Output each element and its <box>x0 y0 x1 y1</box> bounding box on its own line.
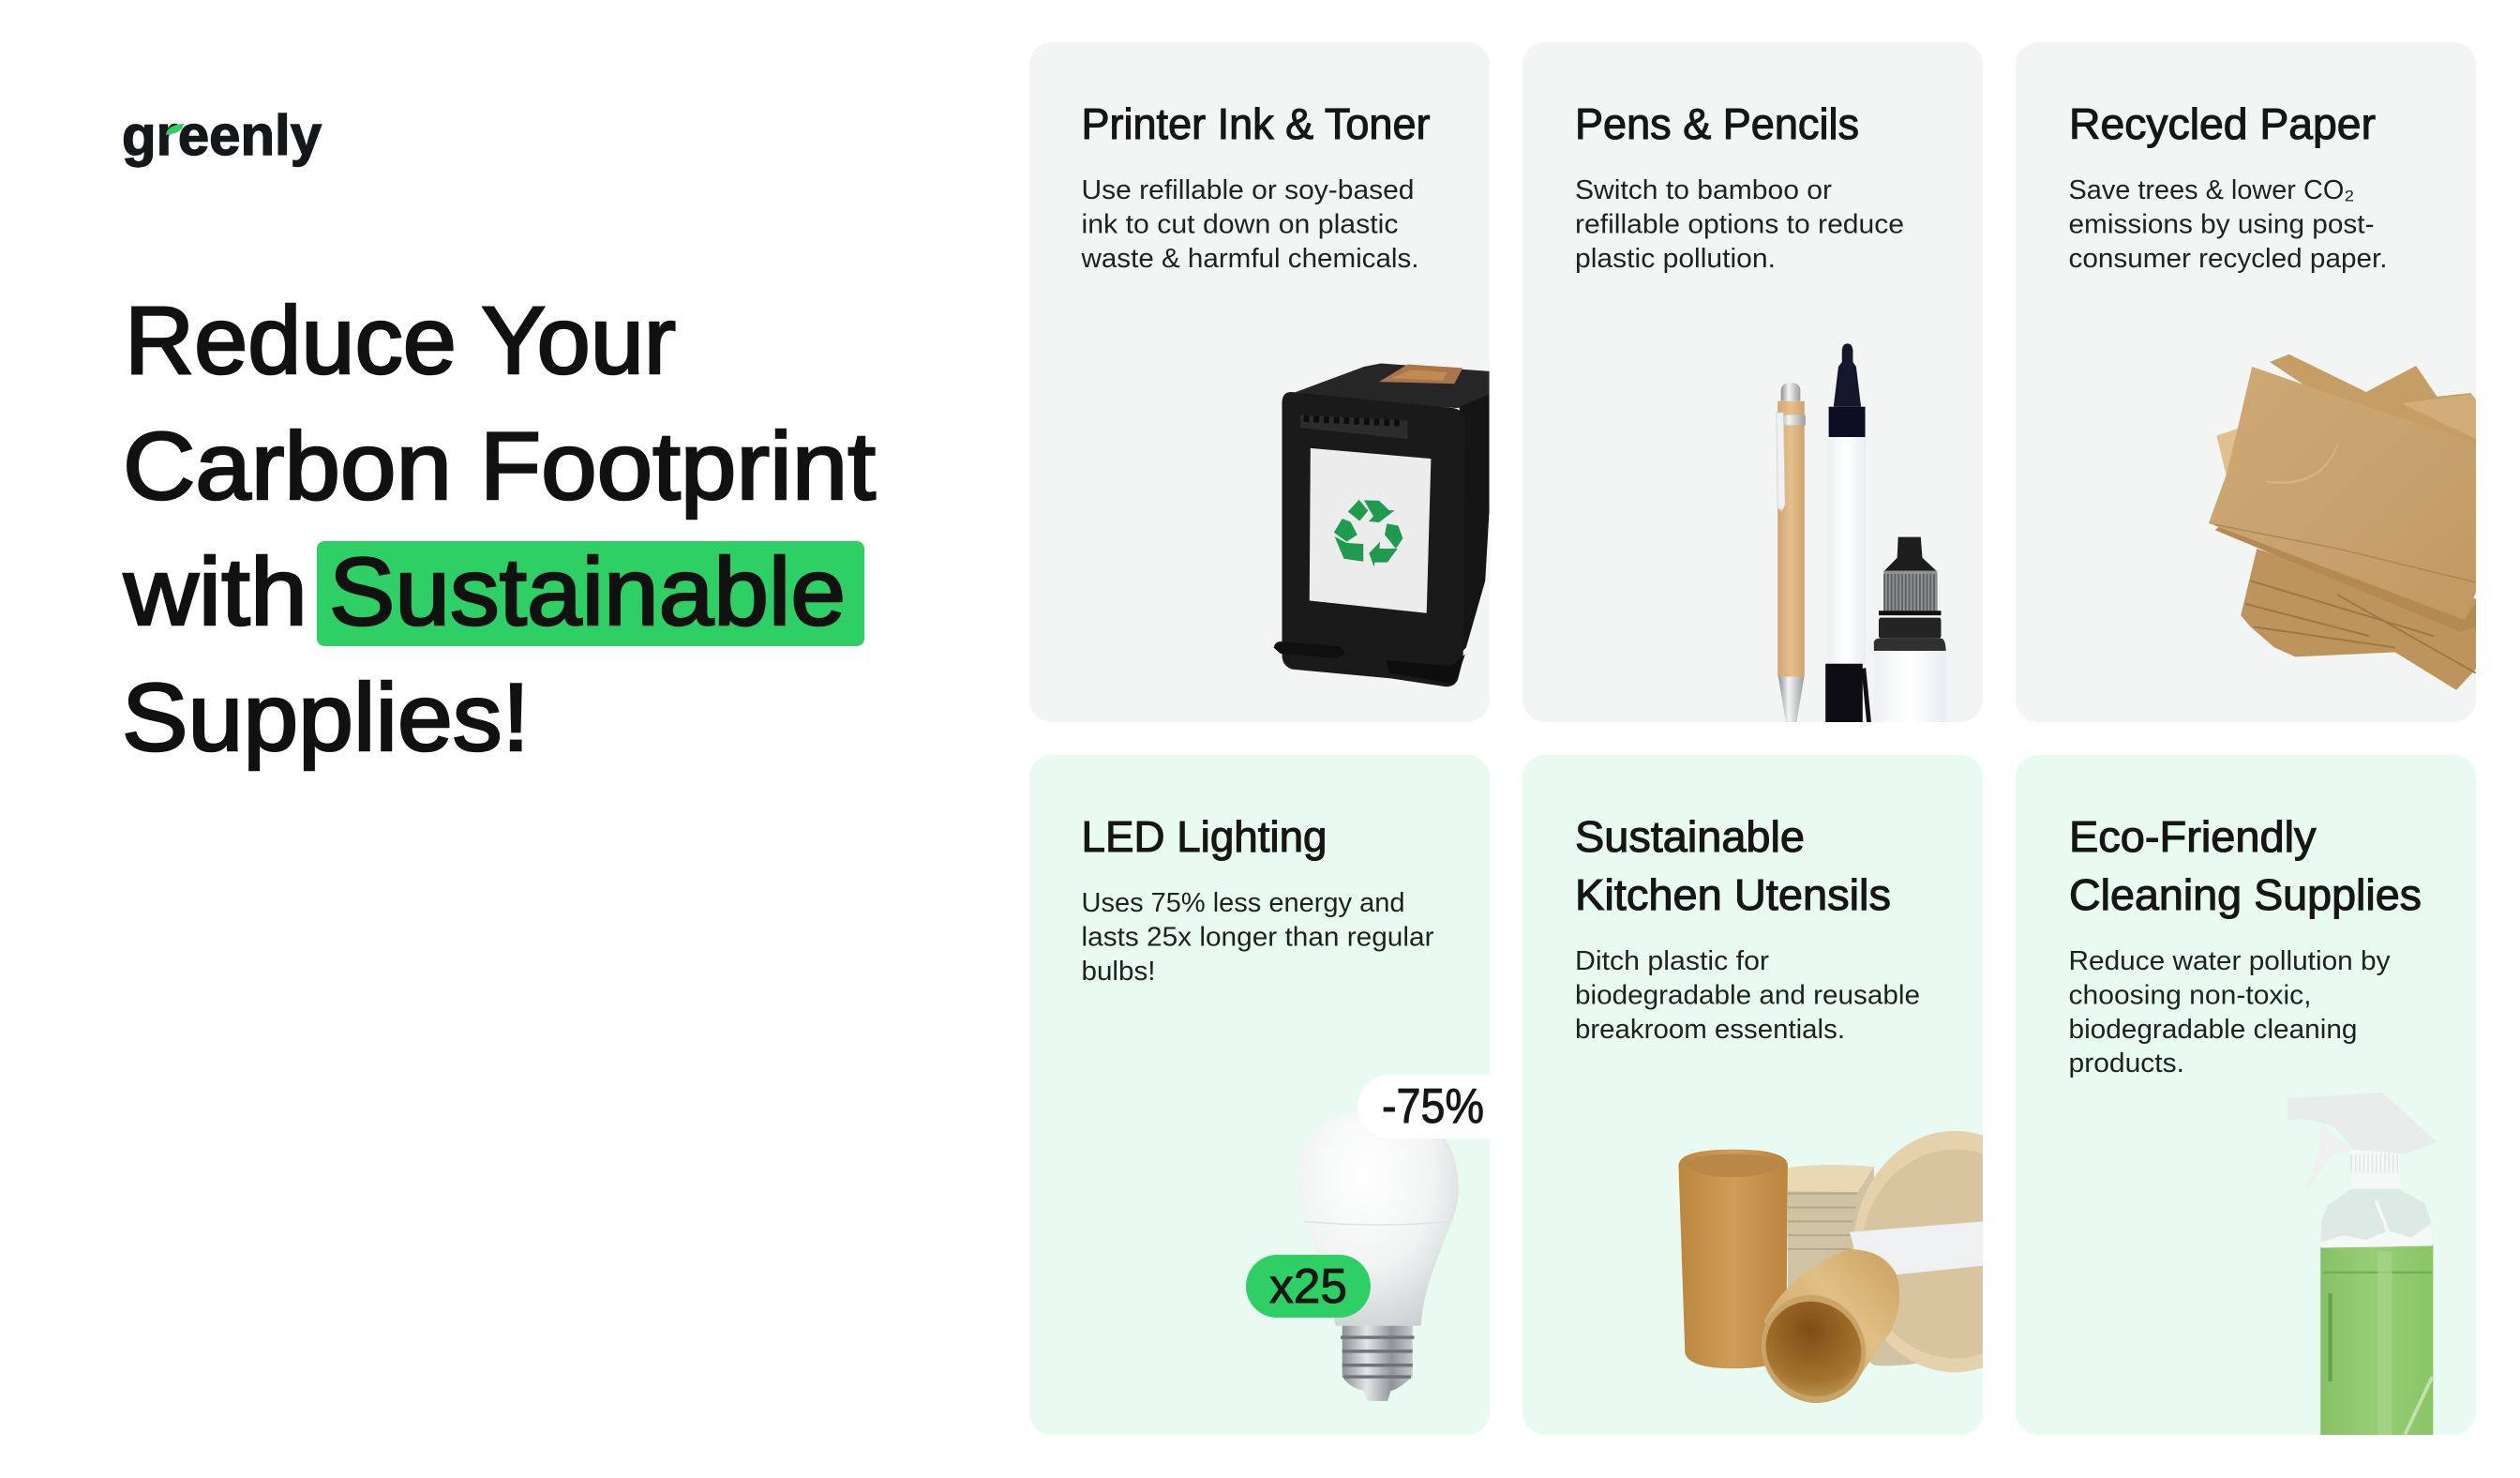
card title: Sustainable <box>1575 812 1805 861</box>
icon: ink cartridge <box>1274 364 1490 686</box>
icon: stack of kraft paper <box>2209 354 2479 690</box>
card description: Uses 75% less energy and <box>1082 888 1404 918</box>
icon: spray bottle <box>2288 1093 2437 1437</box>
badge: x25 <box>1246 1255 1371 1318</box>
card description <box>2068 946 2391 1078</box>
card description: plastic pollution. <box>1575 244 1776 274</box>
card title: Kitchen Utensils <box>1575 870 1891 919</box>
card description <box>2068 175 2387 274</box>
card description: Ditch plastic for <box>1575 946 1770 976</box>
panel: Sustainable Kitchen Utensils <box>1522 755 1983 1435</box>
panel: Printer Ink & Toner <box>1029 42 1490 722</box>
card description: bulbs! <box>1082 957 1155 987</box>
card title: LED Lighting <box>1082 812 1328 861</box>
icon: bamboo pen <box>1777 383 1806 724</box>
card description: refillable options to reduce <box>1575 209 1904 239</box>
card description: lasts 25x longer than regular <box>1082 922 1434 952</box>
panel: Recycled Paper <box>2016 42 2479 722</box>
card description: breakroom essentials. <box>1575 1015 1845 1045</box>
main heading: Reduce Your <box>125 287 676 394</box>
card description <box>1575 175 1904 274</box>
card description: products. <box>2068 1048 2184 1078</box>
label with recycling symbol <box>1310 448 1431 613</box>
icon: bamboo cups and plates <box>1678 1131 1983 1403</box>
card title: Printer Ink & Toner <box>1082 99 1431 148</box>
main heading: Supplies! <box>122 664 530 771</box>
card description: biodegradable and reusable <box>1575 980 1920 1010</box>
card description: choosing non-toxic, <box>2068 980 2312 1010</box>
card title <box>2069 812 2422 919</box>
logo: greenly: greenly <box>122 104 322 167</box>
card description: Switch to bamboo or <box>1575 175 1833 205</box>
icon: leaf on the r <box>166 124 184 135</box>
badge: -75% <box>1358 1075 1490 1139</box>
card description: consumer recycled paper. <box>2068 244 2387 274</box>
card description: emissions by using post- <box>2068 209 2374 239</box>
highlight: Sustainable: Sustainable <box>329 538 846 645</box>
panel: Eco-Friendly Cleaning Supplies <box>2016 755 2476 1437</box>
card description: Use refillable or soy-based <box>1082 175 1414 205</box>
icon: light bulb <box>1298 1110 1459 1401</box>
card description: Save trees & lower CO₂ <box>2068 175 2355 205</box>
panel: LED Lighting <box>1029 755 1536 1435</box>
card description: Reduce water pollution by <box>2068 946 2391 976</box>
icon: ink bottle <box>1874 537 1946 725</box>
card description: biodegradable cleaning <box>2068 1015 2357 1045</box>
card description: waste & harmful chemicals. <box>1080 244 1419 274</box>
card description <box>1083 892 1434 981</box>
card description <box>1577 950 1919 1039</box>
badge: x25: x25 <box>1269 1259 1347 1314</box>
card description <box>1082 179 1417 268</box>
main heading <box>122 287 876 771</box>
card title: Cleaning Supplies <box>2069 870 2422 919</box>
card title: Eco-Friendly <box>2069 812 2316 861</box>
card title: Recycled Paper <box>2069 99 2376 148</box>
badge: -75%: -75% <box>1382 1079 1484 1134</box>
main heading: with <box>123 538 308 645</box>
panel: Pens & Pencils <box>1522 42 1983 725</box>
main heading: Carbon Footprint <box>123 413 876 520</box>
card title: Pens & Pencils <box>1575 99 1859 148</box>
icon: marker <box>1825 343 1869 724</box>
card title <box>1577 820 1890 911</box>
card description: ink to cut down on plastic <box>1082 209 1399 239</box>
